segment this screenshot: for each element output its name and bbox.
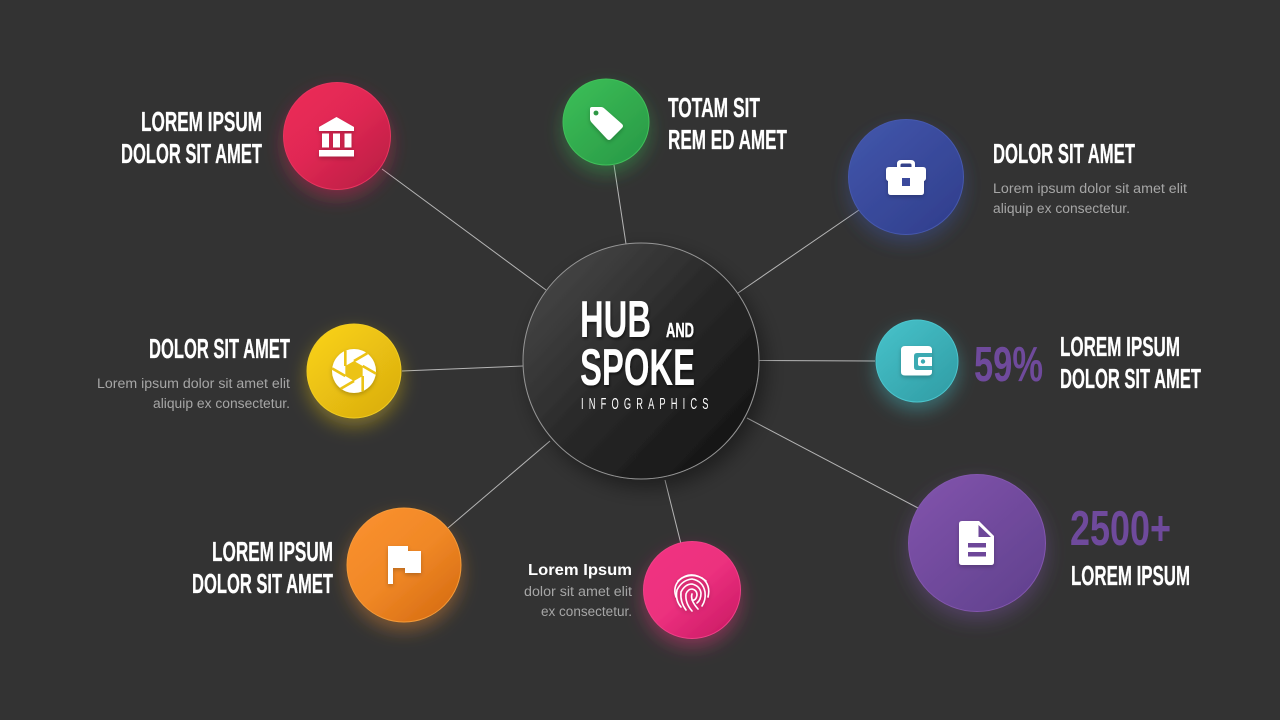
node: red xyxy=(121,82,390,190)
orange label xyxy=(192,536,333,599)
purple circle xyxy=(908,474,1046,612)
red circle xyxy=(284,82,390,190)
pink description: dolor sit amet elit xyxy=(524,584,632,599)
orange label: DOLOR SIT AMET xyxy=(192,568,333,599)
teal label xyxy=(1060,331,1201,394)
red label: DOLOR SIT AMET xyxy=(121,138,262,169)
green label xyxy=(668,92,787,155)
teal stat: 59% xyxy=(974,338,1043,392)
green circle xyxy=(563,79,649,165)
teal label: LOREM IPSUM xyxy=(1060,331,1180,362)
orange label: LOREM IPSUM xyxy=(212,536,333,567)
hub title: SPOKE xyxy=(580,339,695,397)
red label xyxy=(121,106,262,169)
node: orange xyxy=(192,508,461,622)
icon: tag xyxy=(590,107,623,140)
blue description: Lorem ipsum dolor sit amet elit xyxy=(993,181,1187,196)
pink circle xyxy=(644,542,740,638)
yellow circle xyxy=(307,324,401,418)
orange circle xyxy=(347,508,461,622)
node: purple xyxy=(908,474,1190,612)
green label: REM ED AMET xyxy=(668,124,787,155)
hub title: HUB xyxy=(580,291,651,349)
yellow description: aliquip ex consectetur. xyxy=(153,396,290,411)
purple stat: 2500+ xyxy=(1070,502,1171,556)
hub title xyxy=(580,291,695,397)
spokes xyxy=(382,165,918,544)
yellow description: Lorem ipsum dolor sit amet elit xyxy=(97,376,290,391)
blue description: aliquip ex consectetur. xyxy=(993,201,1130,216)
hub circle xyxy=(523,243,759,479)
blue description xyxy=(993,181,1187,216)
node: blue xyxy=(848,120,1187,234)
icon: briefcase xyxy=(886,160,926,195)
yellow description xyxy=(97,376,290,411)
icon: fingerprint xyxy=(675,575,709,611)
node: green xyxy=(563,79,787,165)
icon: aperture xyxy=(332,349,376,393)
pink description xyxy=(524,584,632,619)
hub xyxy=(523,243,759,479)
hub title: AND xyxy=(666,320,694,342)
blue circle xyxy=(848,120,964,234)
node: yellow xyxy=(97,324,401,418)
icon: wallet xyxy=(901,346,932,376)
icon: document xyxy=(959,521,994,565)
icon: flag xyxy=(388,546,421,584)
node: pink xyxy=(524,542,740,638)
hub subtitle: INFOGRAPHICS xyxy=(581,394,714,413)
red label: LOREM IPSUM xyxy=(141,106,262,137)
purple label: LOREM IPSUM xyxy=(1071,560,1190,591)
icon: bank xyxy=(319,117,354,156)
node: teal xyxy=(876,320,1201,402)
yellow label: DOLOR SIT AMET xyxy=(149,333,290,364)
green label: TOTAM SIT xyxy=(668,92,760,123)
pink label: Lorem Ipsum xyxy=(528,562,632,579)
teal circle xyxy=(876,320,958,402)
blue label: DOLOR SIT AMET xyxy=(993,138,1135,169)
pink description: ex consectetur. xyxy=(541,604,632,619)
